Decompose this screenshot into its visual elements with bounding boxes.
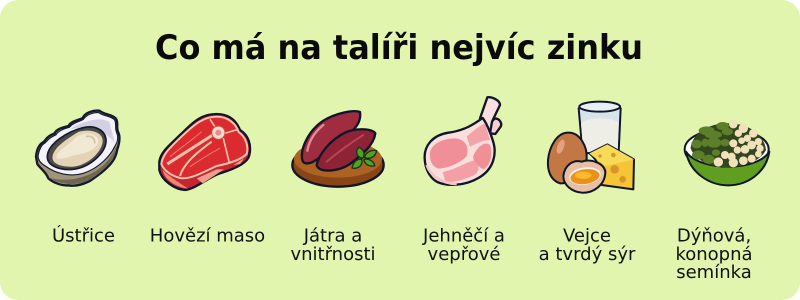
icon: beef steak	[159, 114, 250, 190]
label: beef: Hovězí maso	[150, 226, 265, 246]
title: Co má na talíři nejvíc zinku	[155, 28, 643, 68]
label: lamb and pork: vepřové	[428, 244, 500, 265]
label: pumpkin and hemp seeds: konopná	[675, 244, 753, 265]
label: liver and organ meats	[290, 226, 376, 265]
label: eggs and hard cheese	[539, 226, 636, 265]
icon: oyster	[36, 111, 119, 186]
label: liver and organ meats: vnitřnosti	[290, 244, 376, 265]
label: lamb and pork: Jehněčí a	[422, 226, 505, 246]
label: pumpkin and hemp seeds	[675, 226, 753, 283]
label: oysters: Ústřice	[52, 224, 115, 246]
icon: lamb and pork chop	[425, 97, 501, 185]
icon: egg, milk and cheese	[548, 102, 634, 193]
label: pumpkin and hemp seeds: Dýňová,	[677, 226, 751, 246]
icon: liver on wooden board	[292, 111, 384, 187]
label: eggs and hard cheese: a tvrdý sýr	[539, 244, 636, 265]
label: eggs and hard cheese: Vejce	[563, 226, 611, 246]
label: liver and organ meats: Játra a	[303, 226, 362, 246]
label: lamb and pork	[422, 226, 505, 265]
icon: bowl of pumpkin and hemp seeds	[685, 120, 769, 185]
label: pumpkin and hemp seeds: semínka	[676, 262, 752, 283]
